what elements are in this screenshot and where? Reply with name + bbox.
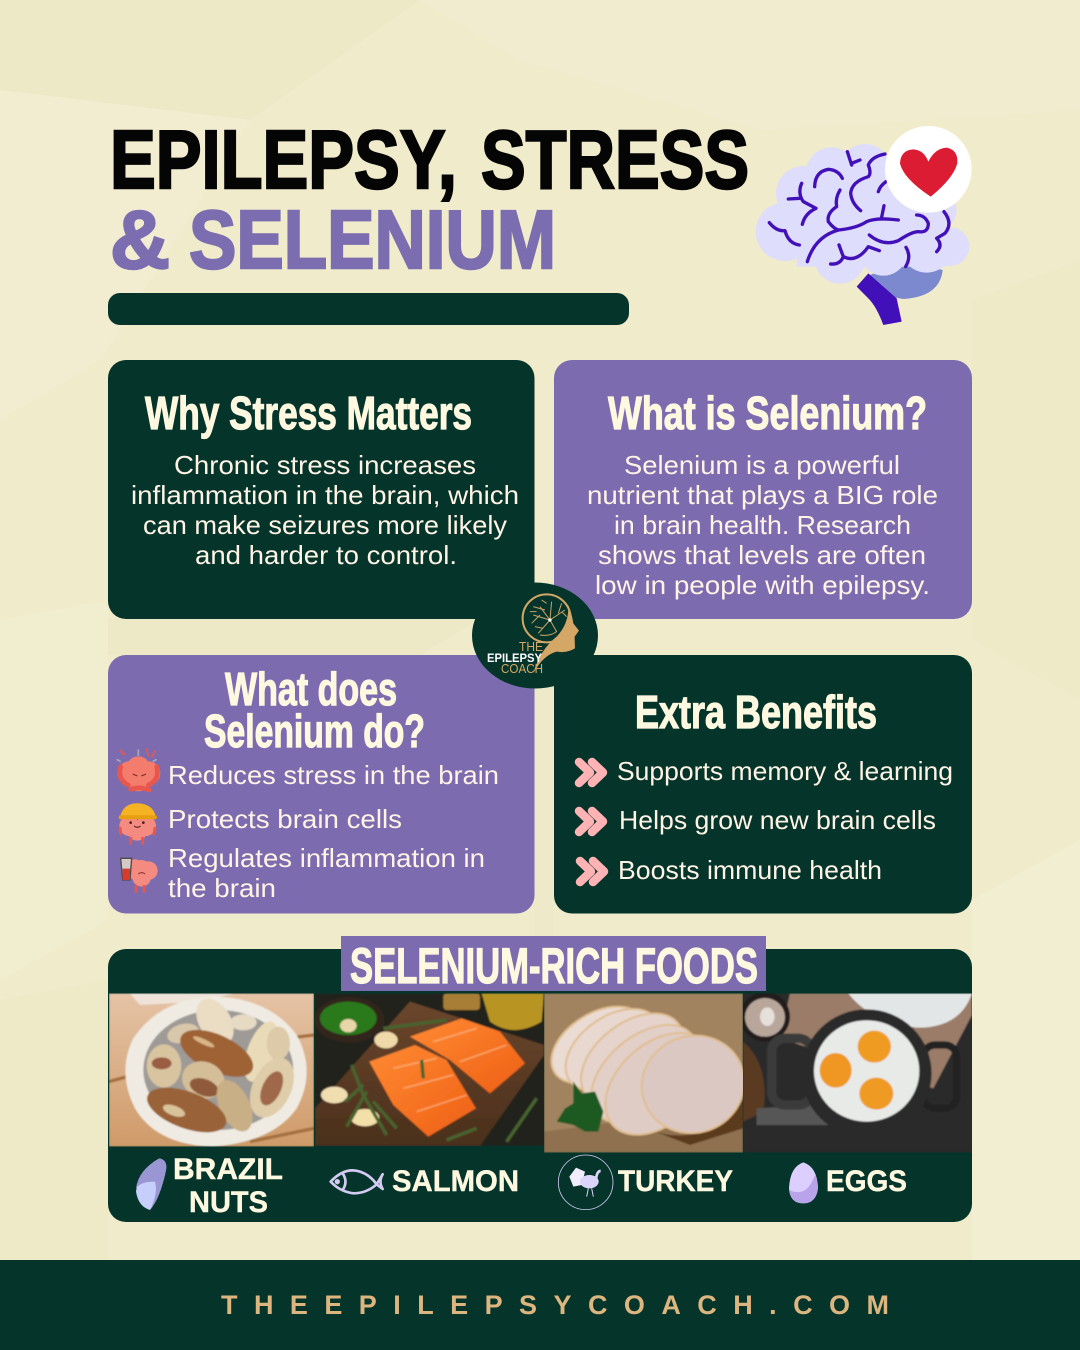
text: selenium explanation <box>587 450 938 600</box>
icon: stressed brain <box>117 748 160 791</box>
text: stress explanation: Chronic stress increases <box>174 450 476 480</box>
label: eggs: EGGS <box>826 1165 907 1198</box>
text: stress explanation <box>131 450 519 570</box>
photo: brazil nuts <box>109 992 314 1147</box>
heading: what is selenium: What is Selenium? <box>608 387 927 439</box>
title <box>110 113 749 286</box>
heading: what does selenium do <box>204 663 425 757</box>
panel: why stress matters <box>108 360 534 619</box>
icon: turkey <box>558 1155 613 1210</box>
label: brazil nuts: BRAZIL <box>173 1153 283 1186</box>
text: selenium explanation: low in people with epilepsy. <box>595 570 930 600</box>
text: stress explanation: inflammation in the brain, which <box>131 480 519 510</box>
list: selenium effects: Regulates inflammation in <box>168 843 485 873</box>
title: & <box>110 193 170 286</box>
icon: double chevron 3 <box>580 861 604 882</box>
logo: the epilepsy coach: THE <box>519 640 543 654</box>
photo: eggs <box>740 992 972 1153</box>
footer <box>0 1260 1080 1350</box>
label: brazil nuts: NUTS <box>189 1186 268 1219</box>
text: selenium explanation: Selenium is a powerful <box>624 450 900 480</box>
title: EPILEPSY, <box>110 113 457 206</box>
text: selenium explanation: nutrient that plays a BIG role <box>587 480 938 510</box>
text: brain cells benefit: Helps grow new brain cells <box>619 805 936 835</box>
text: selenium explanation: shows that levels are often <box>598 540 926 570</box>
label: turkey: TURKEY <box>618 1165 733 1198</box>
heading: why stress matters: Why Stress Matters <box>145 387 472 439</box>
text: immune benefit: Boosts immune health <box>618 855 882 885</box>
text: stress explanation: can make seizures more likely <box>143 510 507 540</box>
list: selenium effects: Protects brain cells <box>168 804 402 834</box>
heading: extra benefits: Extra Benefits <box>635 686 877 738</box>
icon: double chevron 1 <box>579 762 603 783</box>
label: salmon: SALMON <box>392 1165 519 1198</box>
logo: the epilepsy coach: EPILEPSY <box>487 651 542 665</box>
icon: double chevron 2 <box>579 811 603 832</box>
text: selenium explanation: in brain health. Research <box>614 510 911 540</box>
icon: brain with heart <box>756 126 972 325</box>
banner: selenium-rich foods: SELENIUM-RICH FOODS <box>350 938 758 994</box>
footer website address: THEEPILEPSYCOACH.COM <box>221 1290 889 1320</box>
list: selenium effects <box>168 760 499 903</box>
text: stress explanation: and harder to control. <box>195 540 457 570</box>
logo: the epilepsy coach <box>472 582 598 688</box>
list: selenium effects: the brain <box>168 873 276 903</box>
title: SELENIUM <box>189 193 556 286</box>
label: brazil nuts <box>173 1153 283 1219</box>
panel: selenium-rich foods <box>108 936 972 1222</box>
icon: inflamed brain with battery <box>121 858 158 893</box>
icon: brain with helmet <box>119 803 157 843</box>
icon: brazil nut <box>136 1158 166 1210</box>
panel: extra benefits <box>554 655 972 914</box>
heading: what does selenium do: What does <box>225 663 397 715</box>
photo: salmon <box>314 993 544 1146</box>
panel: what does selenium do <box>108 655 534 914</box>
banner: selenium-rich foods <box>341 936 766 994</box>
title underline bar <box>108 293 629 325</box>
title: STRESS <box>481 113 749 206</box>
list: selenium effects: Reduces stress in the brain <box>168 760 499 790</box>
logo: the epilepsy coach: COACH <box>501 661 543 676</box>
icon: fish <box>331 1170 383 1193</box>
icon: egg <box>789 1162 818 1203</box>
panel: what is selenium <box>554 360 972 619</box>
text: memory benefit: Supports memory & learning <box>617 756 953 786</box>
heading: what does selenium do: Selenium do? <box>204 705 425 757</box>
photo: turkey <box>544 993 743 1153</box>
